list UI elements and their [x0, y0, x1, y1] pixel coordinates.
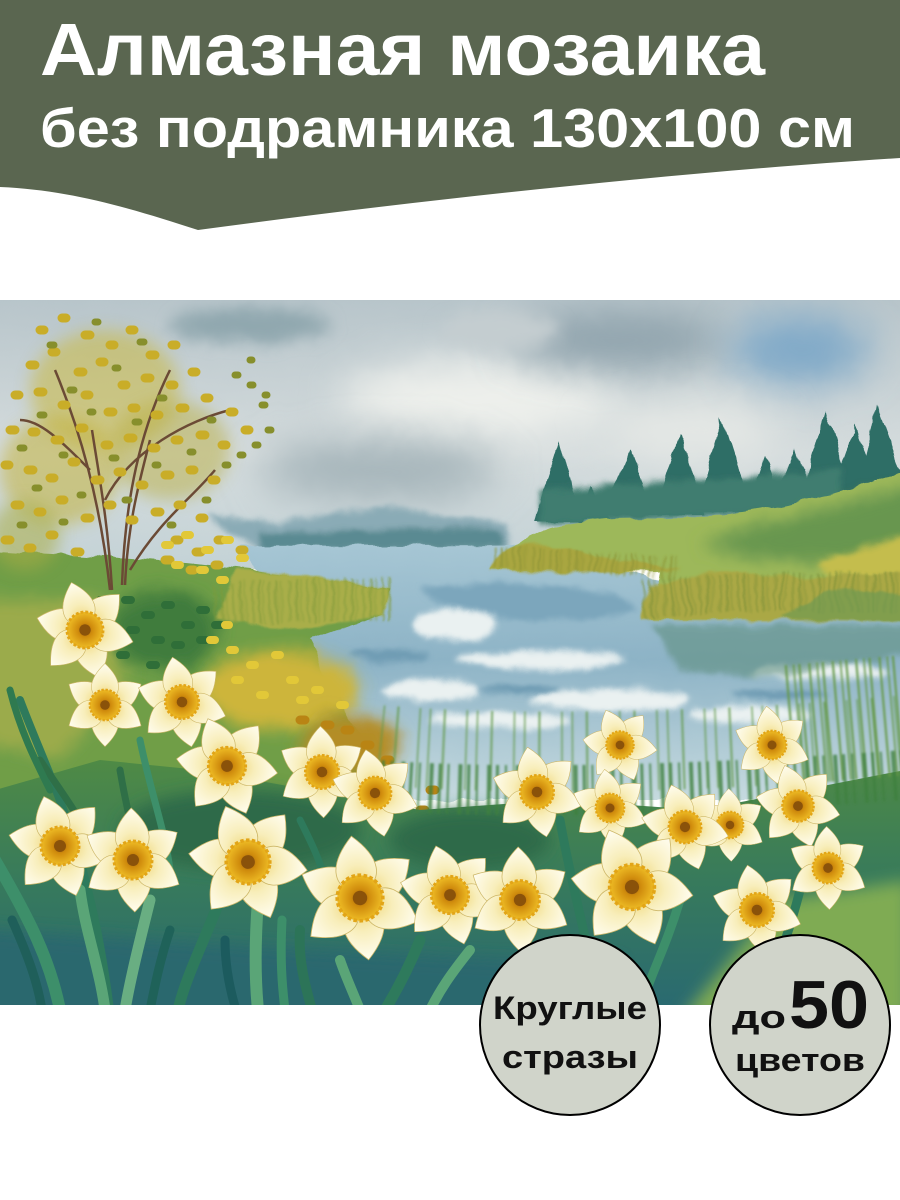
painting: daffodils by the lake — [0, 280, 900, 1020]
long leaves — [0, 690, 800, 1010]
distant tree line — [205, 508, 510, 550]
painted background landscape — [0, 280, 900, 820]
grass texture — [380, 715, 900, 790]
foreground foliage — [0, 690, 900, 1020]
left bank — [0, 552, 390, 789]
sky — [0, 280, 900, 570]
badge: round rhinestones: Круглые — [493, 990, 647, 1026]
water reflections — [350, 583, 900, 728]
badge: round rhinestones — [480, 935, 660, 1115]
badge: up to 50 colours: цветов — [735, 1042, 865, 1078]
badge: up to 50 colours: 50 — [789, 967, 869, 1043]
title: subheading: без подрамника 130х100 см — [40, 97, 855, 159]
daffodil flowers — [0, 569, 885, 981]
badge: up to 50 colours: до — [732, 999, 786, 1035]
header banner — [0, 0, 900, 230]
title: main heading: Алмазная мозаика — [40, 8, 766, 91]
left bank reeds — [215, 570, 390, 630]
right hill — [490, 460, 900, 620]
badge: up to 50 colours — [710, 935, 890, 1115]
yellow shrubs — [100, 535, 445, 845]
left tree — [0, 318, 271, 590]
forest — [534, 405, 900, 525]
badge: round rhinestones: стразы — [502, 1039, 638, 1075]
water — [240, 545, 900, 800]
reeds on right bank — [490, 544, 900, 622]
